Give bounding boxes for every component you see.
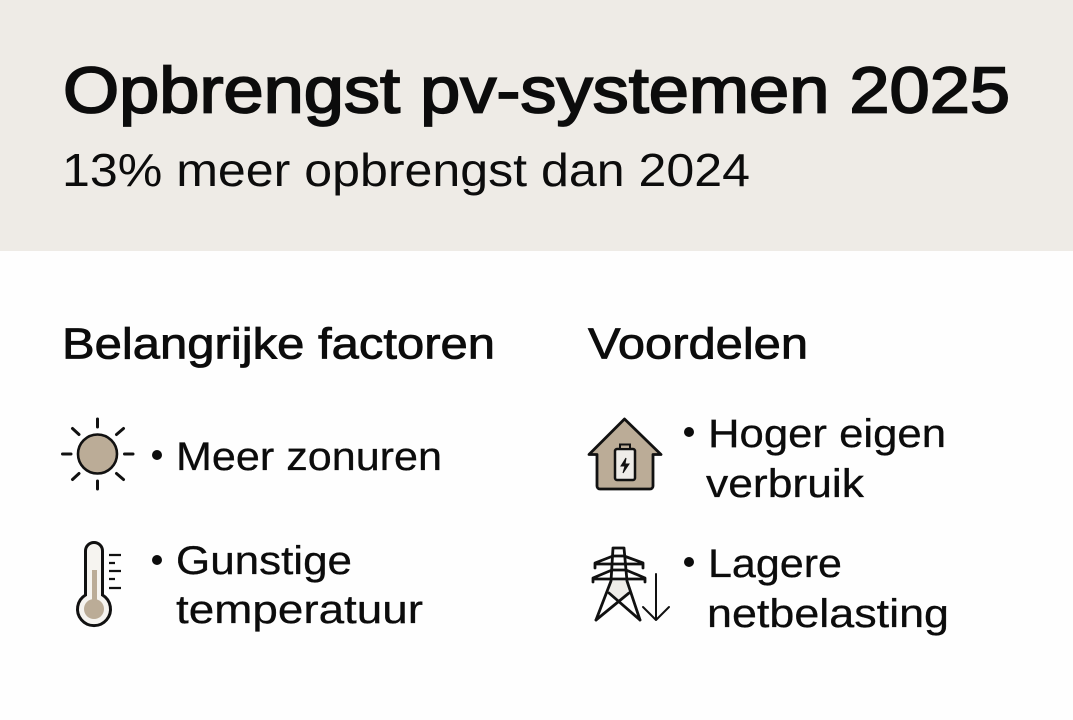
bullet: hoger eigen verbruik: Hoger eigen bbox=[708, 412, 946, 456]
panel: belangrijke factoren bbox=[62, 320, 495, 632]
icon: thermometer bbox=[78, 542, 121, 626]
bullet: lagere netbelasting: netbelasting bbox=[707, 592, 949, 636]
bullet: gunstige temperatuur: temperatuur bbox=[176, 588, 423, 632]
heading: voordelen: Voordelen bbox=[588, 320, 808, 368]
bullet: lagere netbelasting bbox=[684, 542, 949, 636]
bullet: lagere netbelasting: Lagere bbox=[708, 542, 842, 586]
bullet: hoger eigen verbruik: verbruik bbox=[706, 462, 864, 506]
bullet: meer zonuren: Meer zonuren bbox=[176, 435, 442, 479]
icon: sun bbox=[62, 419, 133, 489]
header band bbox=[0, 0, 1073, 251]
title: Opbrengst pv-systemen 2025 bbox=[63, 54, 1010, 126]
bullet: gunstige temperatuur bbox=[152, 539, 423, 632]
icon: house with battery bbox=[589, 419, 661, 489]
bullet: gunstige temperatuur: Gunstige bbox=[176, 539, 352, 583]
panel: voordelen bbox=[588, 320, 949, 636]
bullet: hoger eigen verbruik bbox=[684, 412, 946, 506]
icon: pylon with down arrow bbox=[593, 548, 669, 620]
subtitle: 13% meer opbrengst dan 2024 bbox=[62, 144, 750, 196]
heading: belangrijke factoren: Belangrijke factoren bbox=[62, 320, 495, 368]
